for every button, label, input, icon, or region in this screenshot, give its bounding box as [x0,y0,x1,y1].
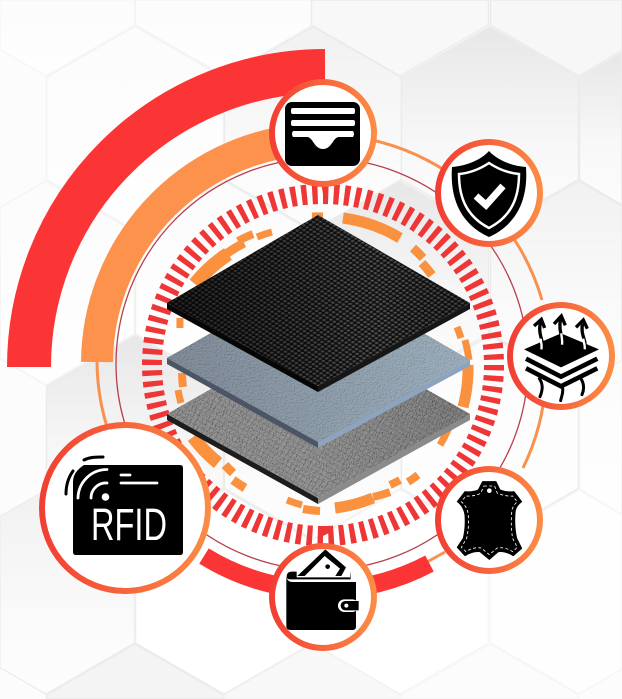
icon badge: security shield [438,142,540,244]
orange arc, left [97,140,300,362]
icon badge: wallet [272,546,374,648]
material layer: black pebbled leather [167,215,470,392]
orange broken ring [178,216,469,511]
large red arc, top left [29,71,325,367]
thin dark red ring [116,158,528,570]
thin orange connector ring [97,140,546,562]
RFID label: RFID [91,499,167,550]
material layer: blue-gray middle [167,272,470,448]
icon badge: breathable layers [510,305,612,407]
wifi waves [66,457,157,501]
material layer: gray woven lining [167,328,470,504]
RFID card [73,465,183,555]
icon badge: RFID protection [42,425,208,591]
icon badge: genuine leather hide [438,469,540,571]
red tick ring [152,194,494,536]
red arc, bottom [204,556,430,590]
icon badge: card holder [272,82,374,184]
